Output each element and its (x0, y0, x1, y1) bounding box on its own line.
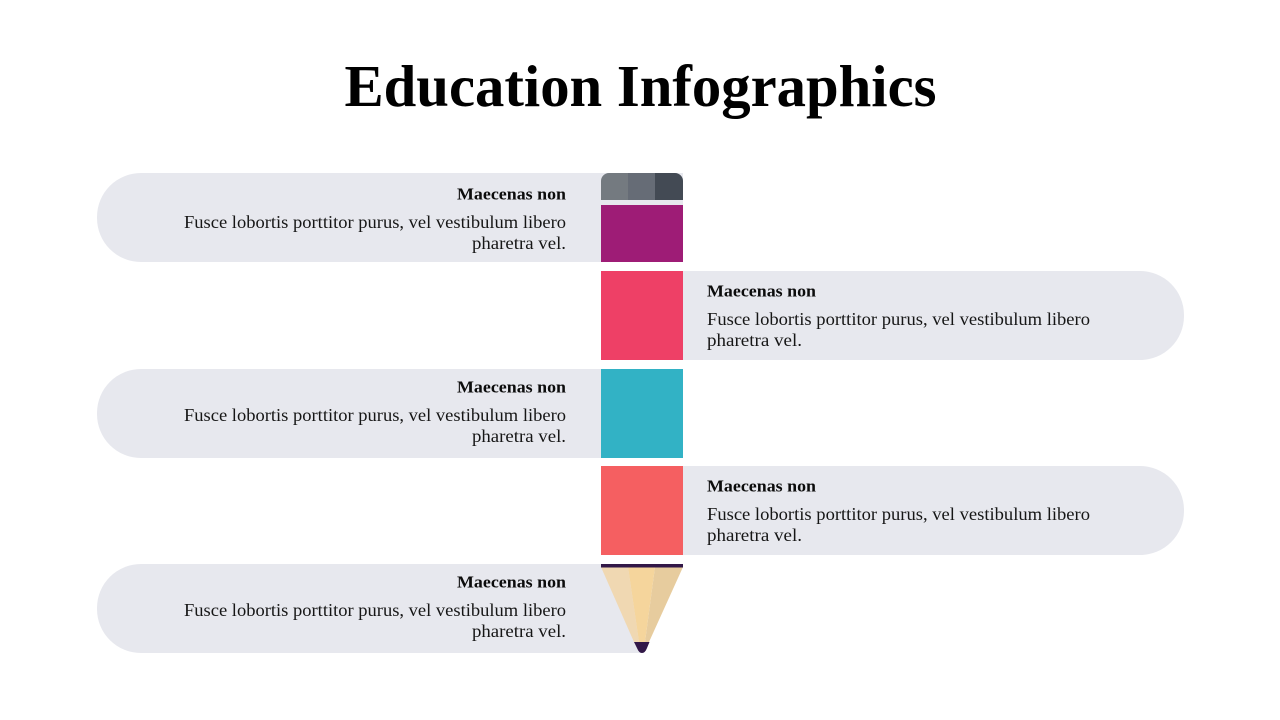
item 3 body: Fusce lobortis porttitor purus, vel vestibulum libero (184, 405, 566, 425)
item 2 body: Fusce lobortis porttitor purus, vel vestibulum libero (707, 309, 1090, 329)
pencil segment: pink (601, 271, 683, 360)
panel: item 3 (97, 369, 601, 458)
item 5 body: Fusce lobortis porttitor purus, vel vestibulum libero (184, 600, 566, 620)
panel: item 4 (683, 466, 1184, 555)
pencil segment: coral (601, 466, 683, 555)
item 1 body: Fusce lobortis porttitor purus, vel vestibulum libero (184, 212, 566, 232)
panel: item 2 (683, 271, 1184, 360)
item 4 body: pharetra vel. (707, 525, 802, 545)
item 1 body: pharetra vel. (472, 233, 566, 253)
item 2 heading: Maecenas non (707, 282, 817, 300)
icon: pencil (601, 173, 683, 653)
item 2 body: pharetra vel. (707, 330, 802, 350)
item 1 heading: Maecenas non (457, 184, 567, 204)
item 4 body: Fusce lobortis porttitor purus, vel vestibulum libero (707, 504, 1090, 524)
pencil segment: purple (601, 205, 683, 262)
panel: item 5 (97, 564, 642, 653)
title: Education Infographics (344, 53, 936, 119)
item 3 body: pharetra vel. (472, 426, 566, 446)
pencil segment: teal (601, 369, 683, 458)
item 5 body: pharetra vel. (472, 621, 566, 641)
item 4 heading: Maecenas non (707, 476, 817, 496)
pencil tip (601, 564, 683, 653)
item 3 heading: Maecenas non (457, 378, 567, 396)
pencil eraser (601, 173, 683, 200)
item 5 heading: Maecenas non (457, 572, 567, 592)
panel: item 1 (97, 173, 683, 262)
